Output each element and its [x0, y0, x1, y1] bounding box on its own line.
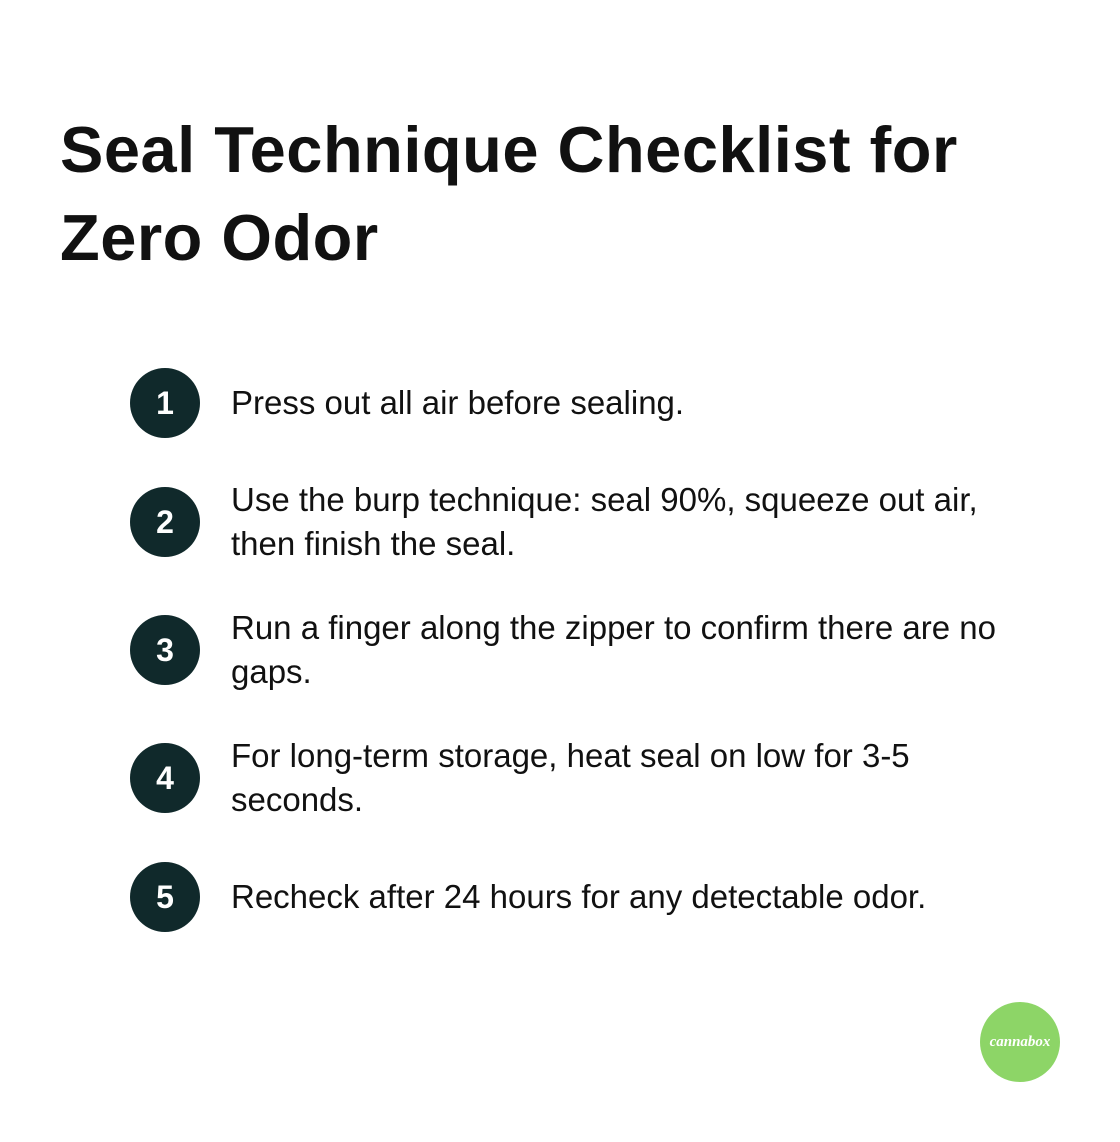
icon: number 1 — [130, 368, 200, 438]
text 5: Recheck after 24 hours for any detectable odor. — [231, 878, 926, 915]
icon: number 4 — [130, 743, 200, 813]
text 2: Use the burp technique: seal 90%, squeeze out air, — [231, 481, 978, 518]
text 2 — [231, 481, 978, 562]
text 3 — [231, 609, 996, 690]
step 4 — [130, 737, 910, 818]
title: Seal Technique Checklist for — [60, 113, 958, 186]
step 1 — [130, 368, 684, 438]
icon: number 5 — [130, 862, 200, 932]
icon: number 1: 1 — [156, 384, 174, 420]
step 5 — [130, 862, 926, 932]
text 3: Run a finger along the zipper to confirm there are no — [231, 609, 996, 646]
text 4: seconds. — [231, 781, 363, 818]
icon: number 2: 2 — [156, 504, 174, 540]
step 2 — [130, 481, 978, 562]
title — [60, 113, 958, 274]
text 1: Press out all air before sealing. — [231, 384, 684, 421]
step 3 — [130, 609, 996, 690]
text 3: gaps. — [231, 653, 312, 690]
icon: number 3: 3 — [156, 632, 174, 668]
logo: cannabox: cannabox — [990, 1034, 1050, 1050]
icon: number 2 — [130, 487, 200, 557]
icon: number 4: 4 — [156, 760, 174, 796]
logo: cannabox — [980, 1002, 1060, 1082]
icon: number 5: 5 — [156, 878, 174, 914]
text 4: For long-term storage, heat seal on low for 3-5 — [231, 737, 910, 774]
title: Zero Odor — [60, 201, 379, 274]
text 2: then finish the seal. — [231, 525, 515, 562]
icon: number 3 — [130, 615, 200, 685]
text 4 — [231, 737, 910, 818]
